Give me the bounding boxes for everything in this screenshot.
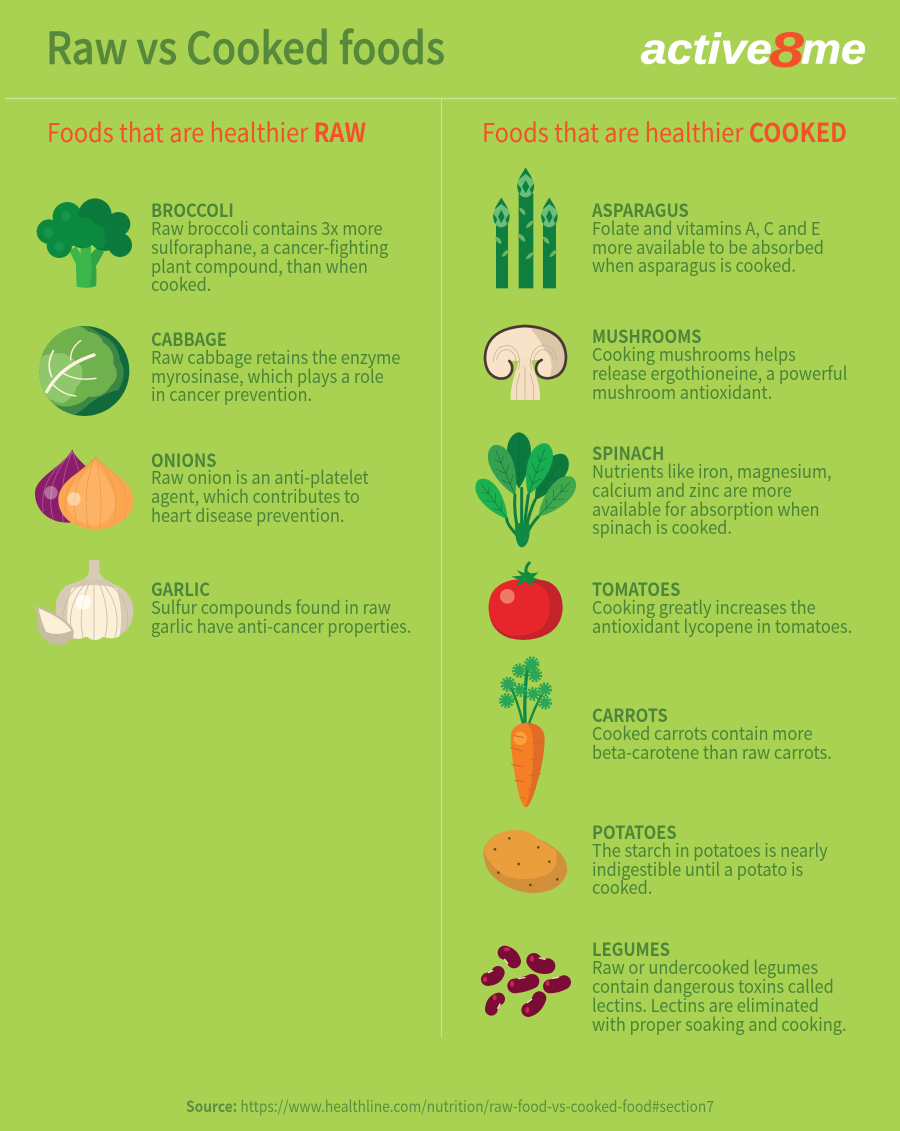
text: mushrooms: mushroom antioxidant.	[592, 378, 772, 404]
text: mushrooms: release ergothioneine, a powerful	[592, 359, 847, 385]
text: carrots: CARROTS	[592, 701, 668, 727]
panel: cooked foods	[470, 167, 852, 1036]
text: cabbage: Raw cabbage retains the enzyme	[151, 343, 400, 369]
text: cabbage: myrosinase, which plays a role	[151, 362, 384, 388]
text: spinach: Nutrients like iron, magnesium,	[592, 457, 832, 483]
logo: active8me	[641, 22, 866, 78]
text: tomatoes: Cooking greatly increases the	[592, 593, 816, 619]
text: broccoli	[151, 196, 389, 296]
text: mushrooms	[592, 322, 847, 404]
text: legumes	[592, 935, 847, 1036]
icon: potato	[483, 830, 567, 893]
text: garlic	[151, 575, 411, 638]
text: asparagus: Folate and vitamins A, C and E	[592, 214, 821, 240]
icon: onions	[35, 449, 133, 529]
text: onions: agent, which contributes to	[151, 482, 360, 508]
icon: legumes	[483, 947, 564, 1013]
icon: carrot	[502, 659, 549, 807]
text: tomatoes	[592, 575, 852, 638]
logo: active8me: me	[801, 26, 866, 74]
heading: foods healthier cooked: Foods that are healthier COOKED	[482, 113, 847, 150]
text: potatoes: POTATOES	[592, 818, 677, 844]
text: legumes: LEGUMES	[592, 935, 670, 961]
text: spinach: available for absorption when	[592, 495, 820, 521]
text: potatoes: indigestible until a potato is	[592, 855, 803, 881]
text: broccoli: cooked.	[151, 270, 211, 296]
icon: mushroom	[485, 326, 566, 400]
title: Raw vs Cooked foods	[46, 13, 445, 77]
text: potatoes: The starch in potatoes is nearly	[592, 836, 828, 862]
text: spinach	[592, 439, 832, 539]
text: legumes: Raw or undercooked legumes	[592, 953, 818, 979]
text: potatoes	[592, 818, 828, 899]
text: asparagus: when asparagus is cooked.	[592, 251, 796, 277]
icon: spinach	[470, 432, 582, 547]
text: onions: ONIONS	[151, 446, 217, 472]
text: garlic: garlic have anti-cancer properties.	[151, 612, 411, 638]
text: legumes: with proper soaking and cooking.	[592, 1010, 847, 1036]
text: carrots: beta-carotene than raw carrots.	[592, 738, 832, 764]
text: legumes: lectins. Lectins are eliminated	[592, 991, 819, 1017]
text: legumes: contain dangerous toxins called	[592, 972, 834, 998]
text: tomatoes: TOMATOES	[592, 575, 681, 601]
logo: active8me: active	[641, 26, 772, 74]
text: cabbage	[151, 325, 400, 406]
text: spinach: spinach is cooked.	[592, 513, 732, 539]
text: broccoli: BROCCOLI	[151, 196, 234, 222]
text: asparagus: more available to be absorbed	[592, 233, 824, 259]
text: tomatoes: antioxidant lycopene in tomatoes.	[592, 612, 852, 638]
heading: foods healthier raw: Foods that are healthier RAW	[47, 113, 366, 150]
text: carrots	[592, 701, 832, 764]
text: mushrooms: Cooking mushrooms helps	[592, 340, 796, 366]
text: onions: heart disease prevention.	[151, 501, 344, 527]
text: spinach: calcium and zinc are more	[592, 476, 792, 502]
panel: raw foods	[33, 196, 411, 645]
text: mushrooms: MUSHROOMS	[592, 322, 702, 348]
text: garlic: GARLIC	[151, 575, 210, 601]
icon: cabbage	[39, 326, 130, 416]
text: potatoes: cooked.	[592, 873, 652, 899]
icon: asparagus	[493, 167, 558, 288]
text: onions: Raw onion is an anti-platelet	[151, 463, 369, 489]
text: broccoli: sulforaphane, a cancer-fighting	[151, 233, 389, 259]
text: spinach: SPINACH	[592, 439, 664, 465]
text: broccoli: plant compound, than when	[151, 252, 368, 278]
text: broccoli: Raw broccoli contains 3x more	[151, 214, 383, 240]
icon: garlic	[36, 560, 133, 645]
text: cabbage: CABBAGE	[151, 325, 227, 351]
text: asparagus: ASPARAGUS	[591, 196, 689, 222]
text: asparagus	[591, 196, 824, 277]
icon: tomato	[489, 563, 563, 640]
icon: broccoli	[37, 198, 132, 288]
text: carrots: Cooked carrots contain more	[592, 719, 813, 745]
source: Source: https://www.healthline.com/nutrition/raw-food-vs-cooked-food#section7	[186, 1095, 714, 1117]
text: cabbage: in cancer prevention.	[151, 380, 312, 406]
text: garlic: Sulfur compounds found in raw	[151, 593, 391, 619]
logo: active8me: 8	[769, 22, 804, 78]
text: onions	[151, 446, 369, 527]
